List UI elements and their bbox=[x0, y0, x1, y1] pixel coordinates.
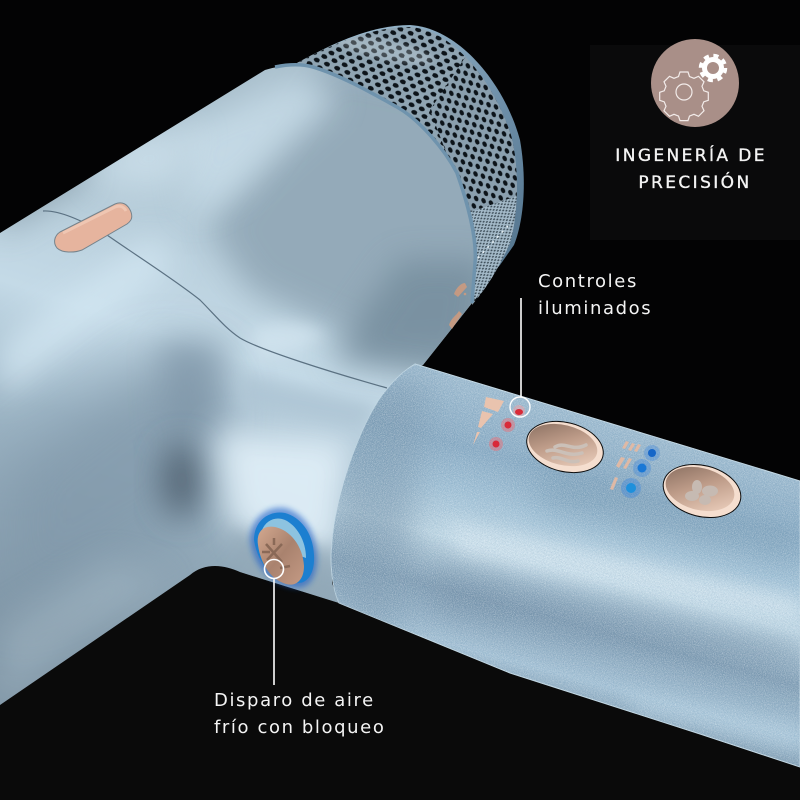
heat button with wave icon bbox=[521, 413, 609, 481]
speed level dots bbox=[621, 445, 660, 498]
label: illuminated controls: Controles bbox=[538, 271, 638, 292]
collar rim bbox=[275, 65, 475, 303]
heading: PRECISIÓN bbox=[638, 171, 752, 193]
nozzle mesh bbox=[297, 25, 530, 305]
seam line bbox=[43, 211, 387, 388]
callout: illuminated controls line and ring bbox=[510, 298, 530, 417]
label: cold shot: Disparo de aire bbox=[214, 690, 375, 711]
speed button with fan icon bbox=[657, 456, 747, 526]
label: illuminated controls: iluminados bbox=[538, 298, 652, 319]
icon: small solid gear bbox=[700, 56, 726, 80]
callout: cold shot line and ring bbox=[264, 560, 284, 685]
cold shot button bbox=[250, 508, 317, 588]
heat level dots bbox=[489, 405, 525, 451]
handle bbox=[320, 355, 800, 775]
heading: INGENERÍA DE bbox=[615, 144, 767, 166]
icon: large outline gear bbox=[660, 72, 708, 121]
icon: gears bbox=[651, 39, 739, 127]
dryer head and body bbox=[0, 60, 520, 705]
head temperature indicators bbox=[449, 283, 467, 329]
label: cold shot: frío con bloqueo bbox=[214, 717, 385, 738]
speed level icons bbox=[610, 441, 641, 490]
heat level icons bbox=[473, 397, 504, 445]
slider switch bbox=[55, 203, 132, 252]
